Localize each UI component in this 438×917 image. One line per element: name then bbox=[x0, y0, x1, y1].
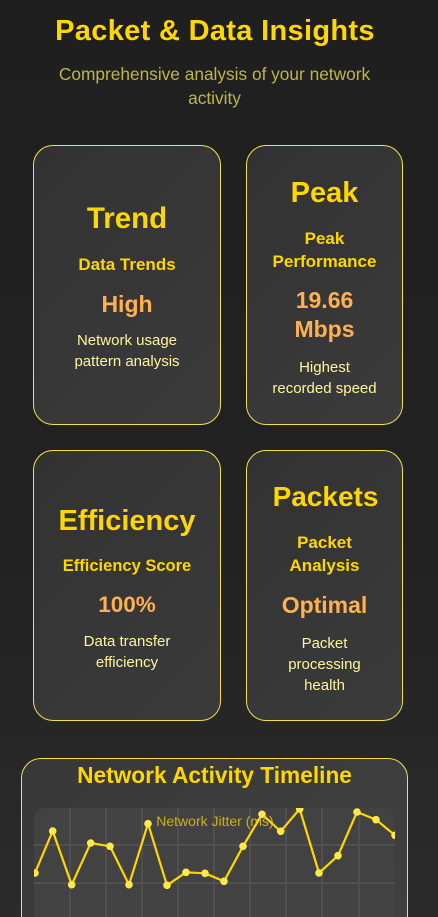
panel: packets bbox=[246, 450, 403, 721]
efficiency value: 100% bbox=[98, 592, 156, 617]
efficiency description: Data transfer bbox=[84, 633, 170, 650]
packets heading: Packets bbox=[273, 481, 378, 512]
packets description: processing bbox=[288, 656, 361, 673]
peak label bbox=[273, 229, 376, 271]
packets description: Packet bbox=[302, 635, 347, 652]
jitter line bbox=[35, 809, 395, 885]
data points bbox=[31, 805, 399, 889]
subtitle: Comprehensive analysis of your network bbox=[59, 64, 370, 84]
trend heading: Trend bbox=[87, 202, 167, 235]
peak value bbox=[294, 287, 355, 342]
title: Packet & Data Insights bbox=[55, 15, 375, 47]
chart title: Network Jitter (ms) bbox=[156, 813, 274, 829]
peak description: recorded speed bbox=[272, 380, 377, 397]
peak description: Highest bbox=[299, 359, 350, 376]
timeline heading: Network Activity Timeline bbox=[77, 762, 352, 788]
peak value: 19.66 bbox=[296, 287, 353, 313]
trend label: Data Trends bbox=[78, 255, 176, 274]
panel: peak bbox=[246, 145, 403, 425]
efficiency heading: Efficiency bbox=[58, 505, 196, 537]
trend description bbox=[74, 332, 180, 370]
packets label: Analysis bbox=[290, 556, 359, 575]
peak heading: Peak bbox=[291, 177, 358, 209]
subtitle: activity bbox=[188, 88, 241, 108]
trend value: High bbox=[101, 291, 153, 317]
packets description: health bbox=[304, 677, 345, 694]
subtitle bbox=[59, 64, 370, 108]
peak label: Performance bbox=[273, 252, 376, 271]
trend description: pattern analysis bbox=[74, 353, 180, 370]
peak value: Mbps bbox=[294, 316, 355, 342]
panel: trend bbox=[33, 145, 221, 425]
efficiency description: efficiency bbox=[96, 654, 158, 671]
line chart: network jitter bbox=[34, 808, 395, 917]
efficiency label: Efficiency Score bbox=[63, 557, 191, 575]
packets description bbox=[288, 635, 361, 694]
panel: efficiency bbox=[33, 450, 221, 721]
packets label: Packet bbox=[297, 533, 352, 552]
peak label: Peak bbox=[305, 229, 344, 248]
efficiency description bbox=[84, 633, 170, 671]
packets value: Optimal bbox=[282, 592, 367, 618]
trend description: Network usage bbox=[77, 332, 177, 349]
packets label bbox=[290, 533, 359, 575]
peak description bbox=[272, 359, 377, 397]
panel: network activity timeline bbox=[21, 758, 408, 917]
